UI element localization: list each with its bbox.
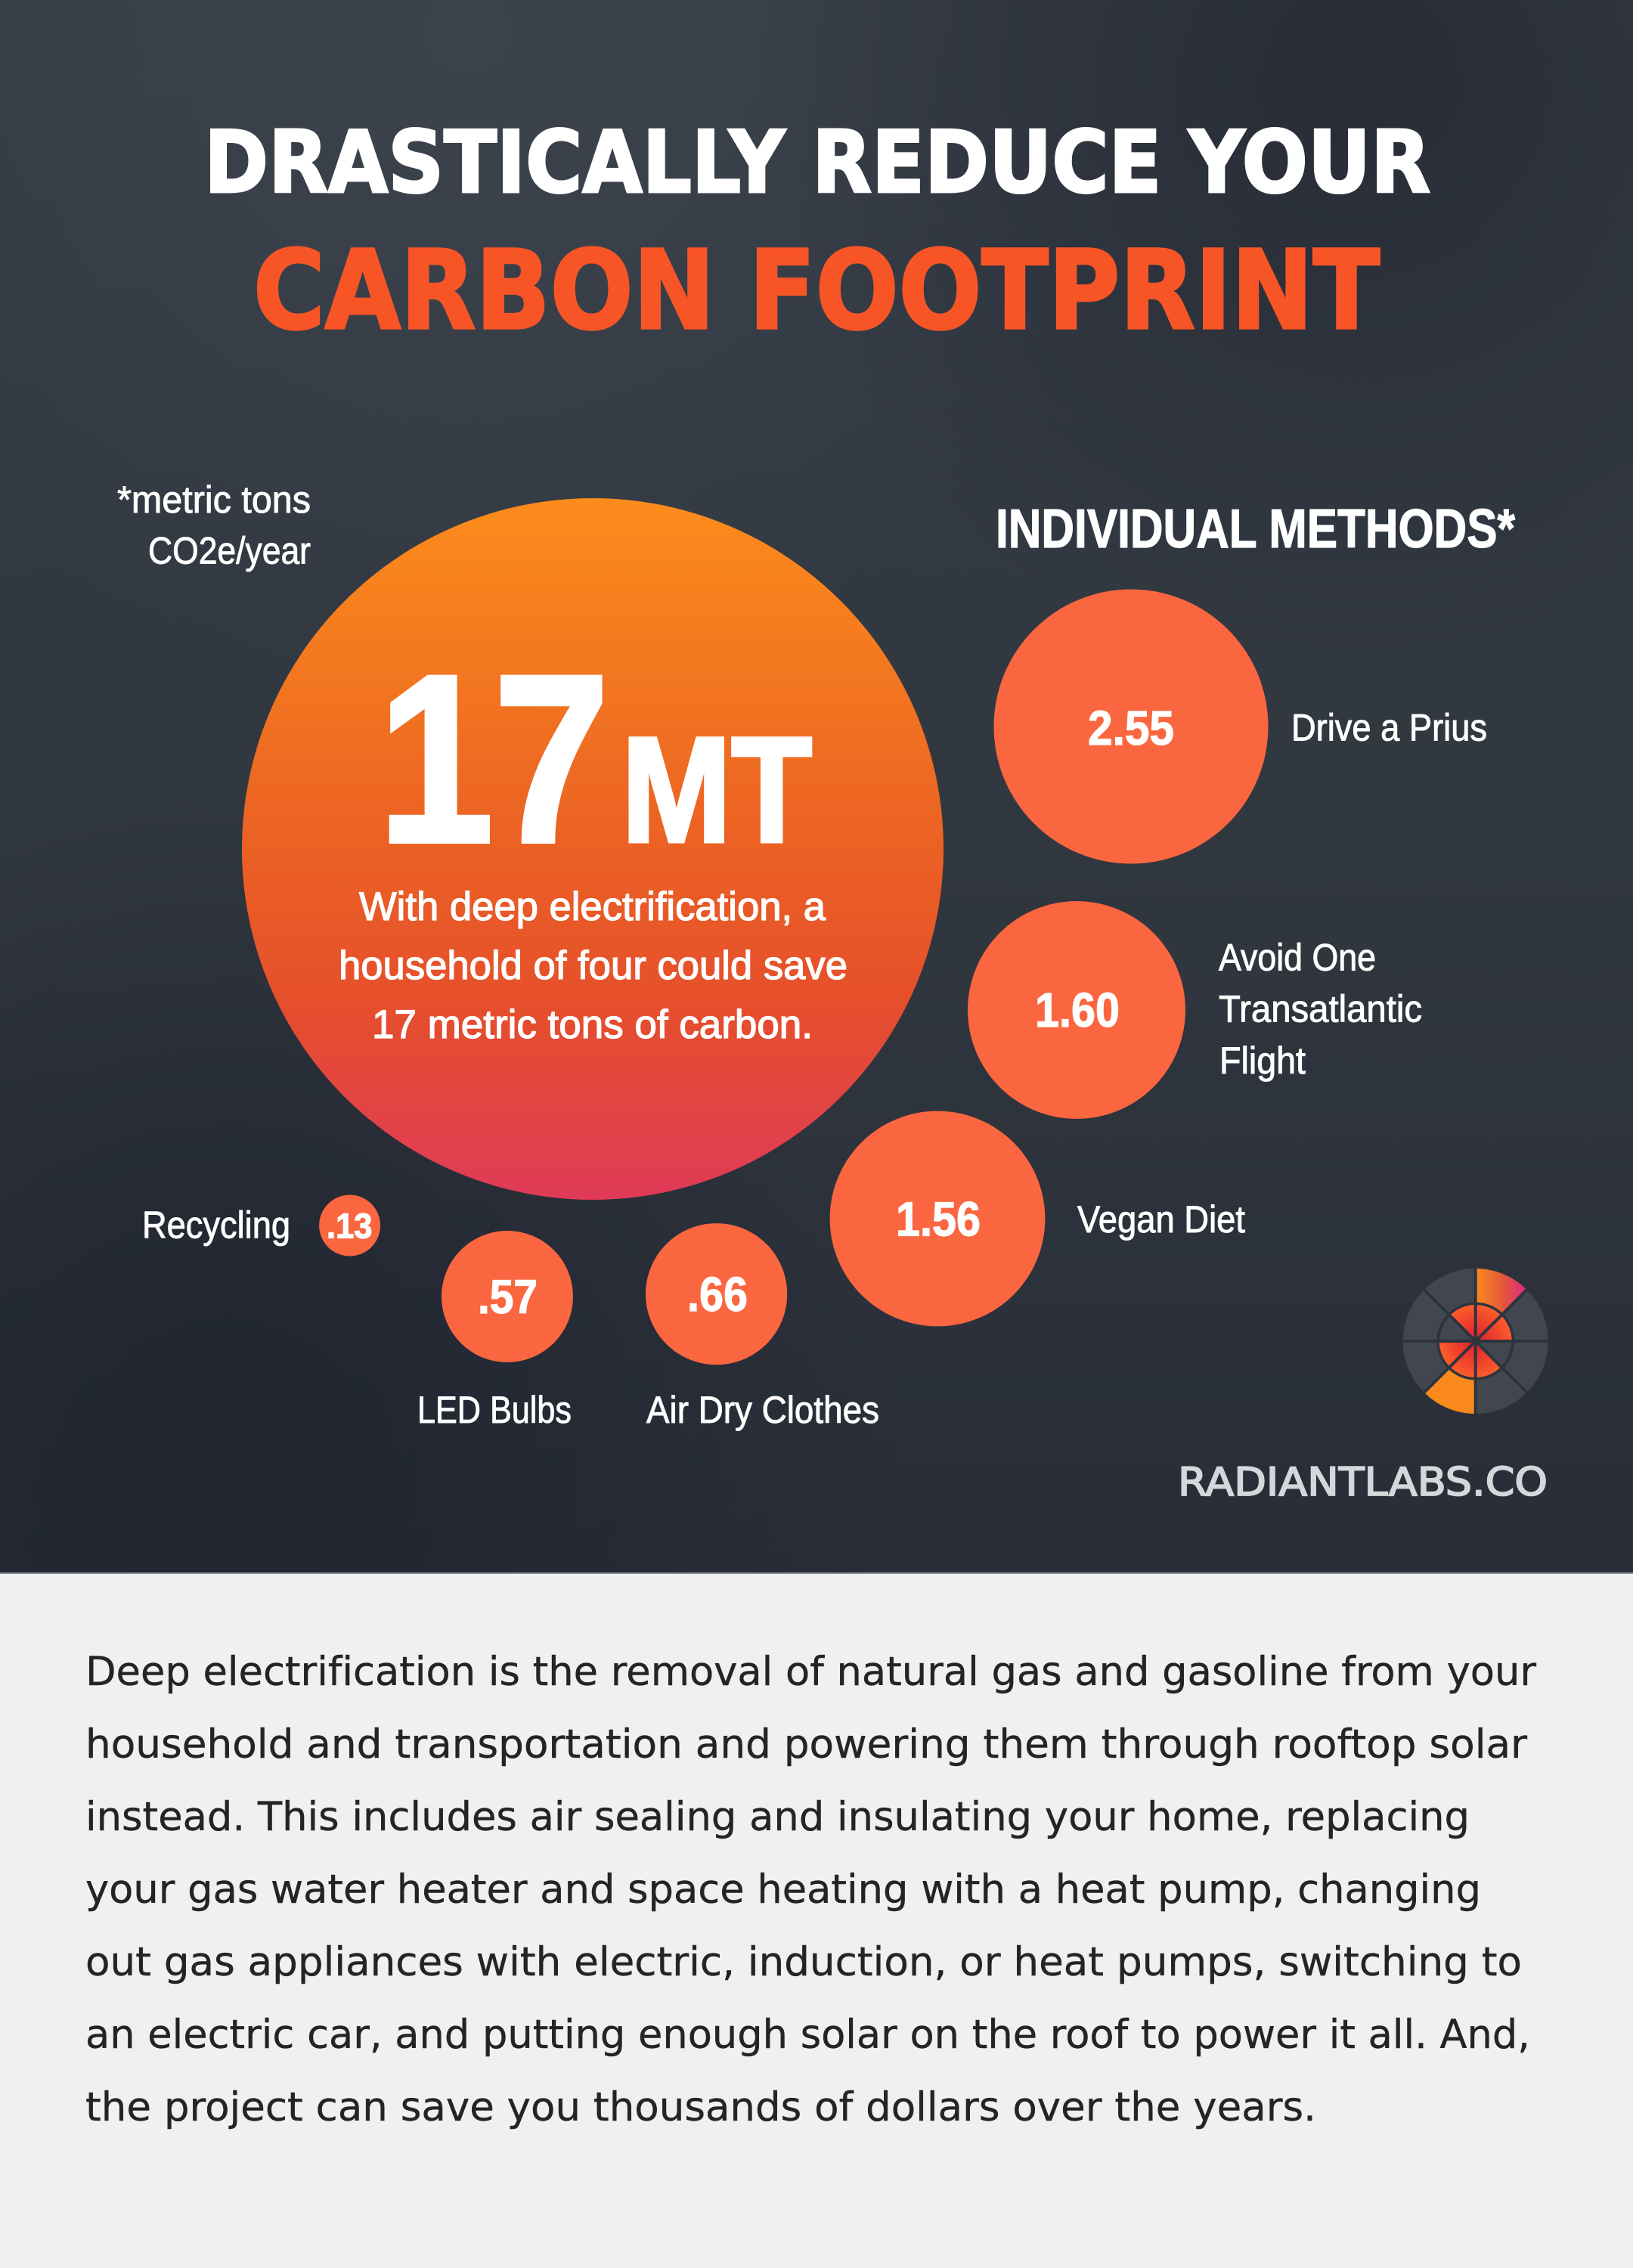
method: vegan diet: 1.56 [896,1191,981,1246]
title line 1: DRASTICALLY REDUCE YOUR [204,113,1430,212]
unit: MT [621,706,812,873]
method: recycling: Recycling [142,1204,290,1246]
method: drive a prius: Drive a Prius [1291,706,1487,748]
brand name: RADIANTLABS.CO [1178,1460,1548,1505]
method: avoid one transatlantic flight [968,901,1422,1119]
main circle description: 17 metric tons of carbon. [372,1002,813,1047]
body text: instead. This includes air sealing and insulating your home, replacing [85,1794,1470,1840]
panel: light text background [0,1574,1633,2268]
method: vegan diet [830,1111,1245,1326]
body text [85,1649,1536,2130]
main circle: 17 MT [242,498,944,1200]
method: led bulbs: LED Bulbs [417,1389,572,1431]
method: recycling: .13 [327,1207,372,1246]
body text: household and transportation and powering them through rooftop solar [85,1721,1527,1768]
note: units [117,479,311,572]
method: avoid one transatlantic flight: Flight [1219,1040,1306,1082]
method: led bulbs: .57 [478,1271,538,1324]
body text: your gas water heater and space heating with a heat pump, changing [85,1867,1481,1913]
method: air dry clothes [646,1223,879,1431]
body text: the project can save you thousands of dollars over the years. [85,2084,1316,2130]
body text: out gas appliances with electric, induction, or heat pumps, switching to [85,1939,1522,1985]
big number: 17 [378,625,609,892]
method: avoid one transatlantic flight: Transatlantic [1219,987,1422,1030]
method: avoid one transatlantic flight: 1.60 [1035,983,1120,1037]
method: drive a prius: 2.55 [1088,701,1174,755]
body text: an electric car, and putting enough solar on the roof to power it all. And, [85,2012,1530,2058]
heading: individual methods: INDIVIDUAL METHODS* [996,499,1515,559]
note: units: *metric tons [117,479,311,521]
main circle description: With deep electrification, a [359,885,826,929]
note: units: CO2e/year [148,529,311,572]
main circle description: household of four could save [339,943,847,988]
method: recycling [142,1194,380,1256]
method: led bulbs [417,1231,573,1431]
body text: Deep electrification is the removal of natural gas and gasoline from your [85,1649,1536,1695]
panel: dark header background [0,0,1633,1574]
method: avoid one transatlantic flight: Avoid One [1219,936,1376,978]
method: vegan diet: Vegan Diet [1077,1198,1245,1241]
icon: radiant labs logo [1402,1268,1549,1414]
method: air dry clothes: .66 [687,1267,748,1321]
title [204,113,1430,354]
method: air dry clothes: Air Dry Clothes [646,1389,879,1431]
main circle description [339,885,847,1047]
method: drive a prius [993,590,1487,863]
title line 2: CARBON FOOTPRINT [253,227,1380,354]
